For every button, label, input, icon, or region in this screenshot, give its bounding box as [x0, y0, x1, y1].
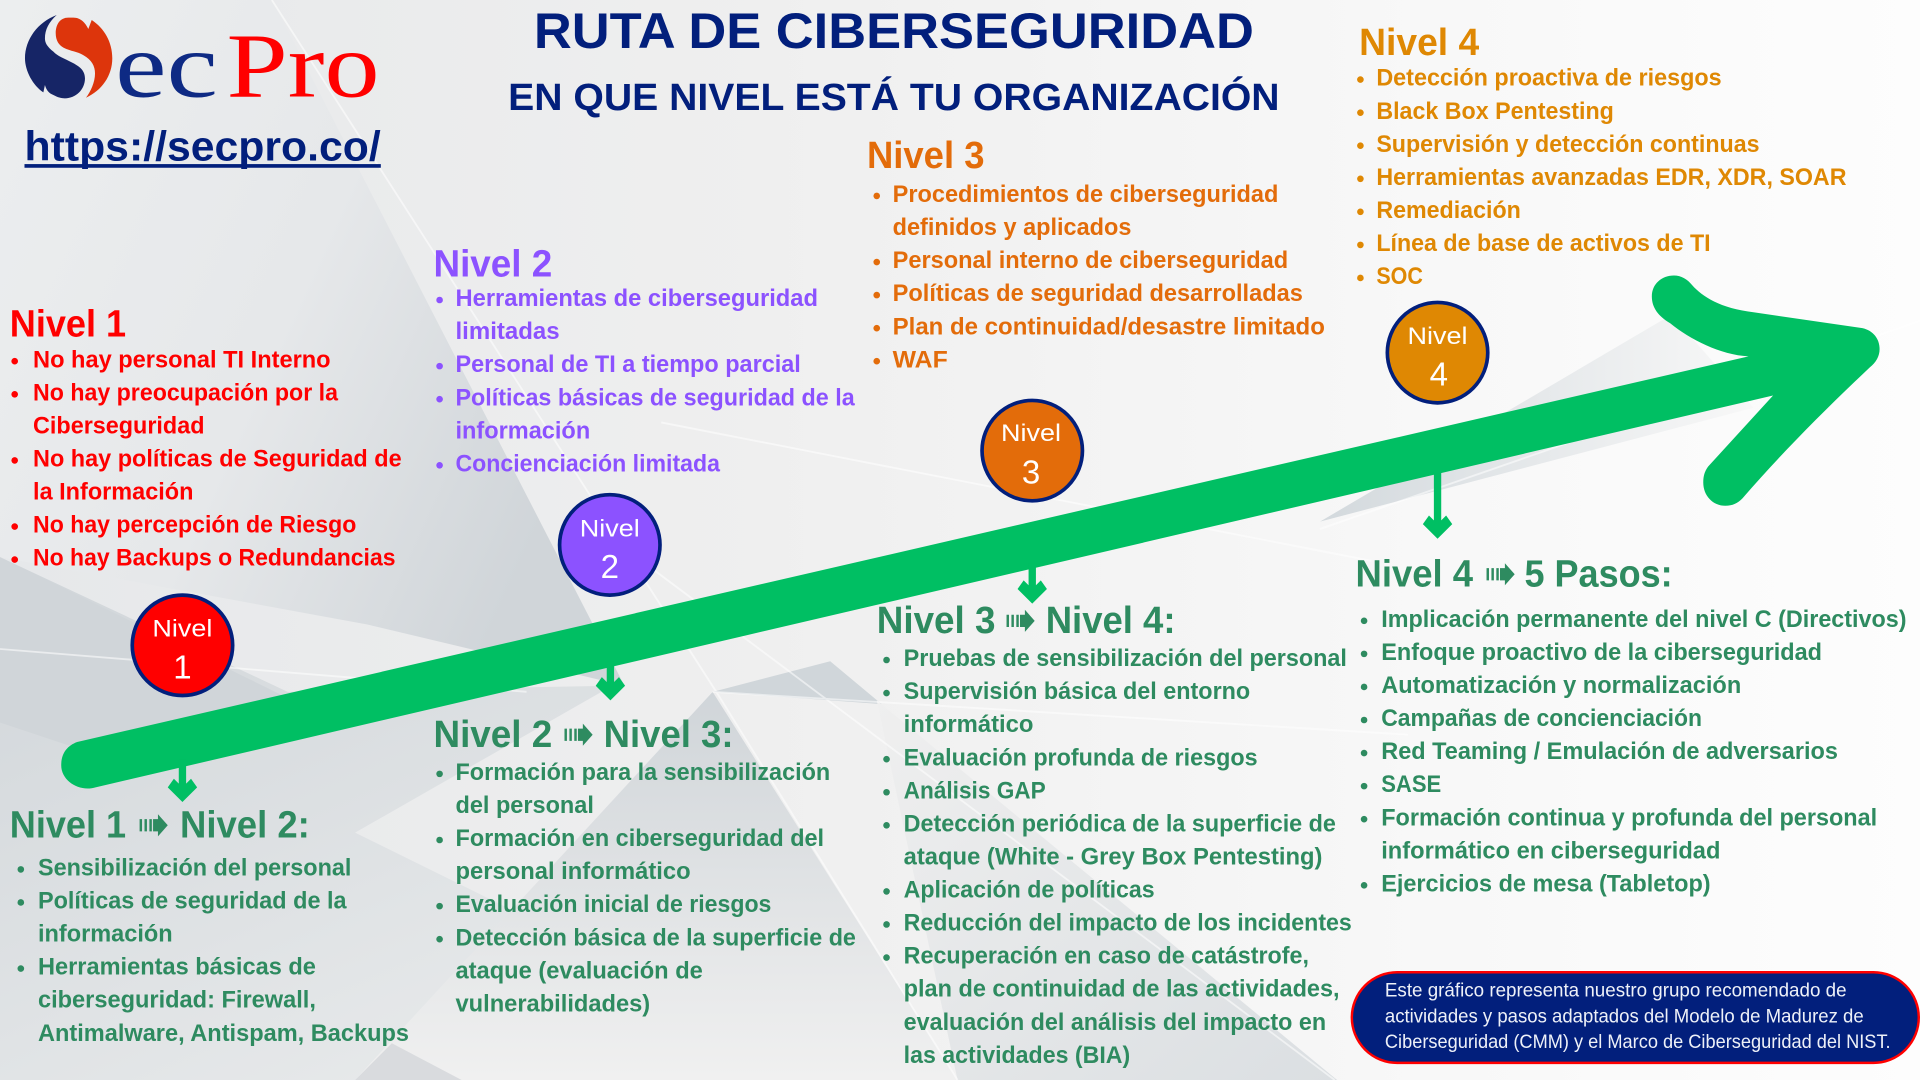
badge: nivel 3: Nivel: [1001, 420, 1061, 447]
list: nivel 4 to 5 pasos: Implicación permanente del nivel C (Directivos): [1381, 606, 1907, 633]
badge: nivel 2: [560, 495, 660, 595]
list: nivel 1: No hay personal TI Interno: [33, 346, 331, 373]
list: nivel 2 to nivel 3: Evaluación inicial de riesgos: [456, 891, 771, 918]
arrow: down to nivel 4 steps: [1423, 471, 1452, 539]
list: nivel 3 to nivel 4: [883, 645, 1352, 1069]
list: nivel 2 to nivel 3: ataque (evaluación de: [456, 957, 703, 984]
heading: nivel 3 to nivel 4: Nivel 3: [877, 600, 996, 642]
list: nivel 4 to 5 pasos: [1361, 606, 1907, 897]
list: nivel 1 to nivel 2: Políticas de seguridad de la: [38, 888, 347, 915]
panel: nivel 2: [433, 244, 855, 477]
list: nivel 2 to nivel 3: personal informático: [456, 858, 691, 885]
list: nivel 3: WAF: [893, 346, 948, 373]
list: nivel 3 to nivel 4: evaluación del análisis del impacto en: [904, 1009, 1326, 1036]
badge: nivel 4: [1387, 302, 1488, 403]
list: nivel 1: No hay Backups o Redundancias: [33, 545, 396, 572]
list: nivel 3 to nivel 4: Supervisión básica del entorno: [904, 678, 1250, 705]
list: nivel 1 to nivel 2: Antimalware, Antispam, Backups: [38, 1020, 409, 1047]
list: nivel 4: SOC: [1376, 263, 1423, 290]
list: nivel 1 to nivel 2: información: [38, 921, 173, 948]
panel: nivel 3 to nivel 4: [877, 600, 1352, 1069]
list: nivel 1 to nivel 2: Herramientas básicas de: [38, 954, 316, 981]
list: nivel 2: Concienciación limitada: [456, 450, 720, 477]
list: nivel 3 to nivel 4: Aplicación de políticas: [904, 877, 1155, 904]
subtitle: EN QUE NIVEL ESTÁ TU ORGANIZACIÓN: [508, 75, 1280, 119]
panel: nivel 1 to nivel 2: [10, 805, 409, 1047]
list: nivel 4: Remediación: [1376, 197, 1521, 224]
heading: nivel 4 to 5 pasos: Nivel 4: [1356, 554, 1473, 596]
heading: nivel 2 to nivel 3: [433, 714, 733, 756]
list: nivel 4 to 5 pasos: Campañas de concienciación: [1381, 705, 1702, 732]
list: nivel 1: Ciberseguridad: [33, 412, 204, 439]
list: nivel 1: [11, 346, 402, 572]
badge: nivel 4: Nivel: [1408, 323, 1468, 350]
badge: nivel 2: 2: [601, 549, 619, 586]
list: nivel 3 to nivel 4: Recuperación en caso de catástrofe,: [904, 943, 1309, 970]
arrow: down to nivel 1 steps: [168, 759, 197, 802]
list: nivel 2 to nivel 3: vulnerabilidades): [456, 990, 650, 1017]
list: nivel 3 to nivel 4: Reducción del impacto de los incidentes: [904, 910, 1352, 937]
list: nivel 3 to nivel 4: Detección periódica de la superficie de: [904, 810, 1336, 837]
list: nivel 4: Línea de base de activos de TI: [1376, 230, 1711, 257]
badge: nivel 3: [982, 400, 1082, 501]
arrow: down to nivel 2 steps: [596, 661, 625, 700]
heading: nivel 3 to nivel 4: [877, 600, 1176, 642]
list: nivel 3 to nivel 4: Evaluación profunda de riesgos: [904, 744, 1258, 771]
list: nivel 1 to nivel 2: [18, 855, 409, 1047]
list: nivel 4 to 5 pasos: Enfoque proactivo de la ciberseguridad: [1381, 639, 1822, 666]
list: nivel 2: limitadas: [456, 318, 560, 345]
list: nivel 1: No hay percepción de Riesgo: [33, 512, 356, 539]
list: nivel 2: información: [456, 417, 590, 444]
list: nivel 3: Políticas de seguridad desarrolladas: [893, 280, 1303, 307]
badge: nivel 3: 3: [1022, 455, 1040, 492]
list: nivel 2: Políticas básicas de seguridad de la: [456, 384, 855, 411]
list: nivel 4 to 5 pasos: Formación continua y profunda del personal: [1381, 804, 1877, 831]
badge: nivel 1: [132, 595, 233, 696]
list: nivel 4: Supervisión y detección continuas: [1376, 131, 1760, 158]
list: nivel 4 to 5 pasos: SASE: [1381, 771, 1441, 798]
list: nivel 4: Black Box Pentesting: [1376, 98, 1614, 125]
callout: methodology note: Este gráfico representa nuestro grupo recomendado de: [1385, 981, 1847, 1002]
icon: S logo: [25, 15, 112, 98]
heading: nivel 1 to nivel 2: Nivel 1: [10, 805, 126, 847]
list: nivel 4: Detección proactiva de riesgos: [1376, 65, 1722, 92]
list: nivel 3: Personal interno de ciberseguridad: [893, 247, 1288, 274]
panel: nivel 4 to 5 pasos: [1356, 554, 1907, 897]
logo wordmark: [115, 15, 380, 117]
list: nivel 1 to nivel 2: ciberseguridad: Firewall,: [38, 987, 316, 1014]
heading: nivel 4: Nivel 4: [1359, 22, 1479, 64]
list: nivel 3: [873, 181, 1325, 373]
logo wordmark: Pro: [227, 15, 380, 117]
list: nivel 2 to nivel 3: Formación en ciberseguridad del: [456, 825, 824, 852]
list: nivel 4 to 5 pasos: Red Teaming / Emulación de adversarios: [1381, 738, 1838, 765]
list: nivel 3: definidos y aplicados: [893, 214, 1131, 241]
list: nivel 1: la Información: [33, 479, 193, 506]
list: nivel 1 to nivel 2: Sensibilización del personal: [38, 855, 351, 882]
list: nivel 2: [436, 285, 855, 477]
heading: nivel 4 to 5 pasos: 5 Pasos:: [1524, 554, 1673, 596]
arrow: down to nivel 3 steps: [1018, 563, 1047, 604]
callout: methodology note: Ciberseguridad (CMM) y el Marco de Ciberseguridad del NIST.: [1385, 1032, 1891, 1053]
list: nivel 3: Procedimientos de ciberseguridad: [893, 181, 1278, 208]
list: nivel 2 to nivel 3: Detección básica de la superficie de: [456, 924, 856, 951]
list: nivel 4: Herramientas avanzadas EDR, XDR, SOAR: [1376, 164, 1847, 191]
heading: nivel 3 to nivel 4: Nivel 4:: [1046, 600, 1176, 642]
panel: nivel 1: [10, 304, 402, 572]
list: nivel 4: [1357, 65, 1847, 290]
panel: nivel 3: [867, 135, 1325, 373]
main growth arrow: [61, 276, 1880, 789]
badge: nivel 1: Nivel: [152, 616, 212, 643]
list: nivel 3 to nivel 4: Análisis GAP: [904, 777, 1046, 804]
list: nivel 1: No hay políticas de Seguridad de: [33, 446, 402, 473]
list: nivel 3: Plan de continuidad/desastre limitado: [893, 313, 1325, 340]
heading: nivel 1: Nivel 1: [10, 304, 126, 346]
heading: nivel 2: Nivel 2: [433, 244, 552, 286]
list: nivel 2 to nivel 3: del personal: [456, 792, 594, 819]
heading: nivel 1 to nivel 2: [10, 805, 310, 847]
badge: nivel 2: Nivel: [580, 515, 640, 542]
list: nivel 1: No hay preocupación por la: [33, 379, 338, 406]
list: nivel 3 to nivel 4: las actividades (BIA): [904, 1042, 1130, 1069]
list: nivel 2: Personal de TI a tiempo parcial: [456, 351, 801, 378]
list: nivel 2 to nivel 3: [436, 759, 856, 1017]
list: nivel 2: Herramientas de ciberseguridad: [456, 285, 818, 312]
list: nivel 4 to 5 pasos: Automatización y normalización: [1381, 672, 1741, 699]
heading: nivel 3: Nivel 3: [867, 135, 984, 177]
heading: nivel 2 to nivel 3: Nivel 3:: [604, 714, 733, 756]
callout: methodology note: [1352, 972, 1919, 1063]
list: nivel 3 to nivel 4: ataque (White - Grey Box Pentesting): [904, 843, 1322, 870]
badge: nivel 1: 1: [173, 649, 192, 686]
logo: SecPro: [25, 15, 380, 117]
list: nivel 3 to nivel 4: informático: [904, 711, 1033, 738]
list: nivel 4 to 5 pasos: informático en ciberseguridad: [1381, 837, 1720, 864]
list: nivel 2 to nivel 3: Formación para la sensibilización: [456, 759, 830, 786]
heading: nivel 2 to nivel 3: Nivel 2: [433, 714, 552, 756]
title: RUTA DE CIBERSEGURIDAD: [534, 3, 1254, 59]
list: nivel 3 to nivel 4: plan de continuidad de las actividades,: [904, 976, 1340, 1003]
list: nivel 4 to 5 pasos: Ejercicios de mesa (Tabletop): [1381, 870, 1711, 897]
badge: nivel 4: 4: [1430, 357, 1448, 394]
panel: nivel 4: [1357, 22, 1847, 290]
list: nivel 3 to nivel 4: Pruebas de sensibilización del personal: [904, 645, 1347, 672]
heading: nivel 1 to nivel 2: Nivel 2:: [180, 805, 310, 847]
logo wordmark: ec: [115, 15, 218, 117]
website link: https://secpro.co/: [24, 122, 381, 169]
callout: methodology note: actividades y pasos adaptados del Modelo de Madurez de: [1385, 1006, 1864, 1027]
heading: nivel 4 to 5 pasos: [1356, 554, 1673, 596]
panel: nivel 2 to nivel 3: [433, 714, 856, 1017]
